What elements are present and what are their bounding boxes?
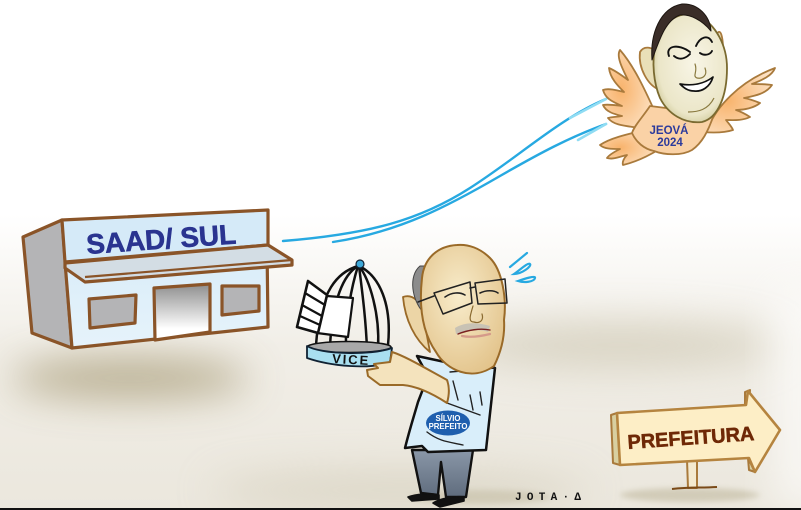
VICE label: VICE: [332, 351, 369, 368]
glasses: [418, 279, 507, 314]
signpost: Prefeitura: [611, 390, 780, 489]
open cage door: [317, 296, 353, 337]
body label: JEOVÁ: [650, 124, 688, 137]
shirt sleeve and folds: [427, 368, 495, 445]
bottom border: [0, 508, 801, 510]
signature: JOTA·Δ: [515, 492, 581, 504]
shirt: [405, 356, 495, 452]
door: [154, 284, 210, 340]
upper sign front: [62, 210, 268, 262]
face: [653, 14, 727, 122]
bird cage labelled VICE: [297, 260, 392, 368]
brows and eyes: [668, 37, 712, 78]
arrow back edge: [611, 390, 755, 472]
ground mark: [672, 487, 717, 489]
left wing: [603, 50, 655, 128]
flight trails: [283, 99, 606, 242]
bird with Jeova head: [600, 4, 775, 165]
cage floor: [307, 342, 391, 352]
post: [687, 460, 697, 488]
arrow board: [617, 391, 780, 472]
Silvio figure: [367, 245, 507, 507]
cage bars: [316, 266, 389, 350]
lower front wall: [65, 245, 268, 348]
side wall: [23, 220, 72, 348]
body: [632, 106, 714, 154]
hair: [652, 4, 711, 60]
cage top knob: [356, 260, 364, 268]
shoes: [408, 494, 464, 507]
ears: [640, 48, 660, 90]
moustache and mouth: [455, 323, 490, 334]
awning: [65, 245, 292, 282]
right window: [222, 286, 259, 315]
arrow text: PREFEITURA: [627, 423, 755, 454]
hair tuft: [413, 266, 426, 312]
campaign badge: [426, 410, 470, 436]
campaign badge: PREFEITO: [429, 422, 467, 431]
campaign badge: SÍLVIO: [436, 414, 460, 423]
mouth: [680, 77, 713, 91]
tail feathers: [600, 130, 658, 165]
arm and hand: [367, 352, 449, 403]
bird with Jeova head: 2024: [657, 137, 683, 149]
left window: [89, 295, 136, 328]
head: [421, 245, 505, 373]
right wing: [702, 68, 775, 133]
eyes, nose, brow lines: [445, 291, 498, 323]
sweat drops: [510, 253, 535, 282]
cage base band: [307, 346, 392, 366]
sign text: SAAD/ SUL: [85, 219, 237, 260]
trousers: [412, 450, 473, 497]
ear: [403, 296, 430, 352]
building: SAAD/SUL: [23, 210, 292, 348]
